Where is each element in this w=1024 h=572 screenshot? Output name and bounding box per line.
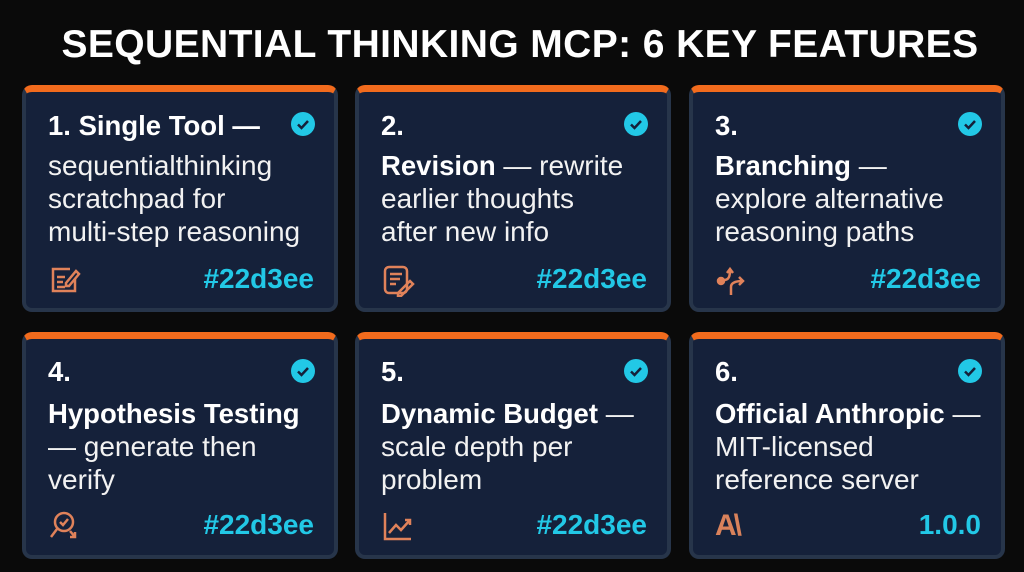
body text: reference server bbox=[715, 464, 919, 495]
body text: after new info bbox=[381, 216, 549, 247]
heading: 4. bbox=[48, 356, 71, 387]
check icon bbox=[291, 112, 315, 136]
heading: 3. bbox=[715, 110, 738, 141]
body text: explore alternative bbox=[715, 183, 944, 214]
body text: Official Anthropic — bbox=[715, 398, 980, 429]
heading: 2. bbox=[381, 110, 404, 141]
body text: multi-step reasoning bbox=[48, 216, 300, 247]
body text: MIT-licensed bbox=[715, 431, 874, 462]
body text: — generate then bbox=[48, 431, 257, 462]
hex label: #22d3ee bbox=[536, 509, 647, 540]
panel: hypothesis testing bbox=[22, 332, 338, 559]
panel: revision bbox=[355, 85, 671, 312]
hex label: #22d3ee bbox=[203, 509, 314, 540]
heading: 6. bbox=[715, 356, 738, 387]
icon: anthropic logo: A\ bbox=[715, 509, 739, 542]
heading: 1. Single Tool — bbox=[48, 110, 260, 141]
panel: dynamic budget bbox=[355, 332, 671, 559]
check icon bbox=[958, 112, 982, 136]
panel: official anthropic bbox=[689, 332, 1005, 559]
body text: Branching — bbox=[715, 150, 887, 181]
body text bbox=[381, 150, 623, 247]
body text bbox=[715, 150, 944, 247]
body text bbox=[48, 398, 300, 495]
body text bbox=[381, 398, 634, 495]
icon: document edit bbox=[384, 266, 415, 297]
body text: verify bbox=[48, 464, 115, 495]
icon: chart bbox=[384, 513, 412, 540]
hex label: #22d3ee bbox=[203, 263, 314, 294]
check icon bbox=[958, 359, 982, 383]
version label: 1.0.0 bbox=[919, 509, 981, 540]
heading: 5. bbox=[381, 356, 404, 387]
body text: Revision — rewrite bbox=[381, 150, 623, 181]
body text: sequentialthinking bbox=[48, 150, 272, 181]
body text bbox=[715, 398, 980, 495]
title: SEQUENTIAL THINKING MCP: 6 KEY FEATURES bbox=[61, 23, 979, 66]
panel: single tool bbox=[22, 85, 338, 312]
check icon bbox=[624, 359, 648, 383]
body text: earlier thoughts bbox=[381, 183, 574, 214]
body text: problem bbox=[381, 464, 482, 495]
icon: edit bbox=[52, 268, 81, 292]
body text: Dynamic Budget — bbox=[381, 398, 634, 429]
hex label: #22d3ee bbox=[536, 263, 647, 294]
check icon bbox=[291, 359, 315, 383]
panel: branching bbox=[689, 85, 1005, 312]
body text bbox=[48, 150, 300, 247]
hex label: #22d3ee bbox=[870, 263, 981, 294]
check icon bbox=[624, 112, 648, 136]
body text: scale depth per bbox=[381, 431, 572, 462]
body text: scratchpad for bbox=[48, 183, 225, 214]
body text: reasoning paths bbox=[715, 216, 914, 247]
icon: branch bbox=[716, 267, 745, 295]
icon: magnifier check bbox=[50, 512, 76, 538]
body text: Hypothesis Testing bbox=[48, 398, 300, 429]
